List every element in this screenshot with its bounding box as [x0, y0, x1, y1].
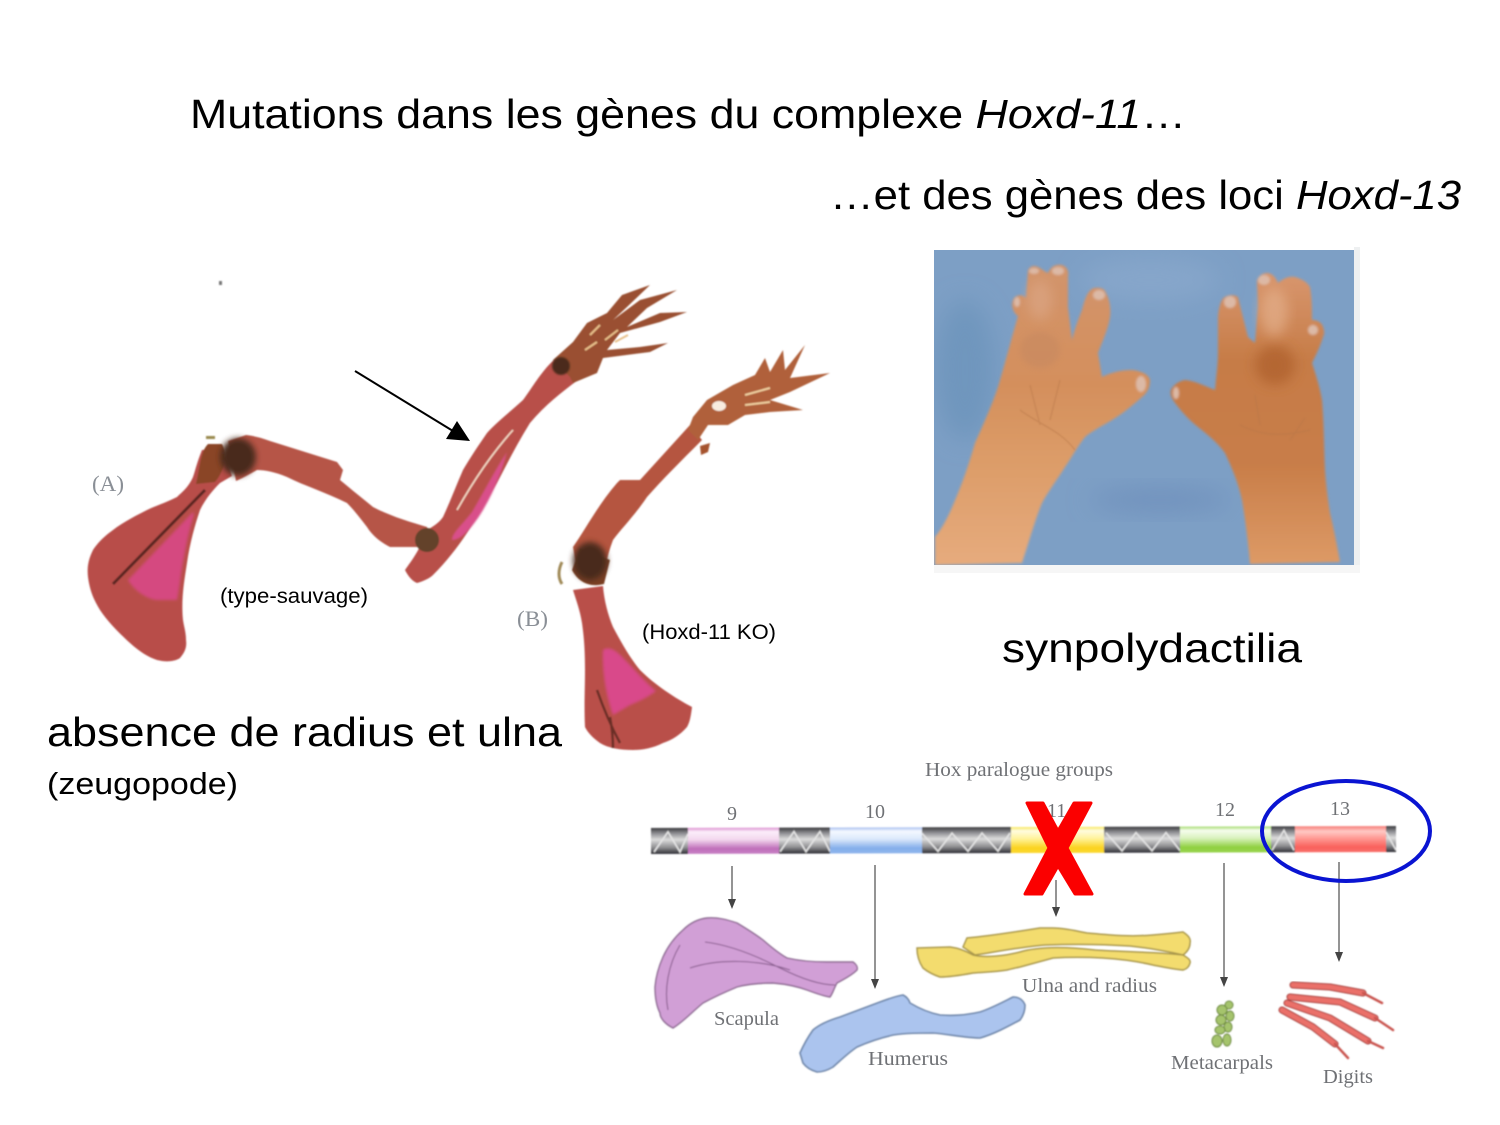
- bone: metacarpals: [1212, 1001, 1234, 1047]
- caption: absence: absence de radius et ulna: [47, 709, 562, 755]
- label type-sauvage: (type-sauvage): [220, 585, 368, 608]
- bone: digits: [1282, 985, 1393, 1058]
- label Hoxd-11 KO: (Hoxd-11 KO): [642, 621, 776, 644]
- diagram: Hox paralogue groups: Ulna and radius: [1022, 975, 1157, 997]
- arrow: [355, 371, 470, 441]
- bone: scapula: [655, 918, 857, 1028]
- bone labels: Scapula: [714, 1008, 779, 1030]
- right hand: [1171, 273, 1340, 564]
- skeleton B: Hoxd-11 KO limb: [559, 345, 830, 750]
- blue circle around group 13: [1262, 781, 1430, 881]
- red X over group 11: [1025, 803, 1092, 894]
- diagram: Hox paralogue groups: Metacarpals: [1171, 1052, 1273, 1074]
- group numbers: 10: [865, 801, 885, 823]
- autopod B: [688, 345, 830, 440]
- bone: ulna and radius: [917, 928, 1190, 977]
- arrows to bones: [728, 862, 1343, 989]
- scapula A: [88, 448, 232, 661]
- label (A): (A): [92, 471, 124, 496]
- group numbers: 11: [1047, 800, 1066, 822]
- humerus B: [573, 425, 702, 570]
- skeleton A: wild type limb: [88, 281, 687, 661]
- diagram: Hox paralogue groups: Humerus: [868, 1048, 948, 1070]
- bone: humerus: [800, 995, 1025, 1072]
- forearm A pink: [452, 452, 507, 540]
- group numbers: [727, 798, 1350, 825]
- humerus A: [228, 435, 432, 547]
- group numbers: 9: [727, 803, 737, 825]
- caption: zeugopode: (zeugopode): [47, 766, 238, 801]
- group numbers: 13: [1330, 798, 1350, 820]
- subtitle: …et des gènes des loci Hoxd-13: [830, 172, 1461, 218]
- scapula B pink: [603, 648, 656, 715]
- label (B): (B): [517, 606, 548, 631]
- diagram title: Hox paralogue groups: [925, 759, 1113, 781]
- nails: [1014, 267, 1318, 399]
- scapula A pink blade: [128, 512, 194, 600]
- left hand: [935, 265, 1150, 565]
- group numbers: 12: [1215, 799, 1235, 821]
- caption: synpolydactilia: synpolydactilia: [1002, 625, 1302, 671]
- ulna and radius A: [405, 358, 578, 583]
- diagram: Hox paralogue groups: Digits: [1323, 1066, 1373, 1088]
- diagram: Hox paralogue groups: [651, 759, 1430, 1088]
- title: Mutations dans les gènes du complexe Hoxd-11 …: [190, 91, 1186, 137]
- autopod A: [553, 285, 687, 383]
- scapula B: [573, 586, 692, 750]
- chromosome bar: [651, 826, 1396, 854]
- photo: hands with synpolydactyly: [934, 247, 1360, 573]
